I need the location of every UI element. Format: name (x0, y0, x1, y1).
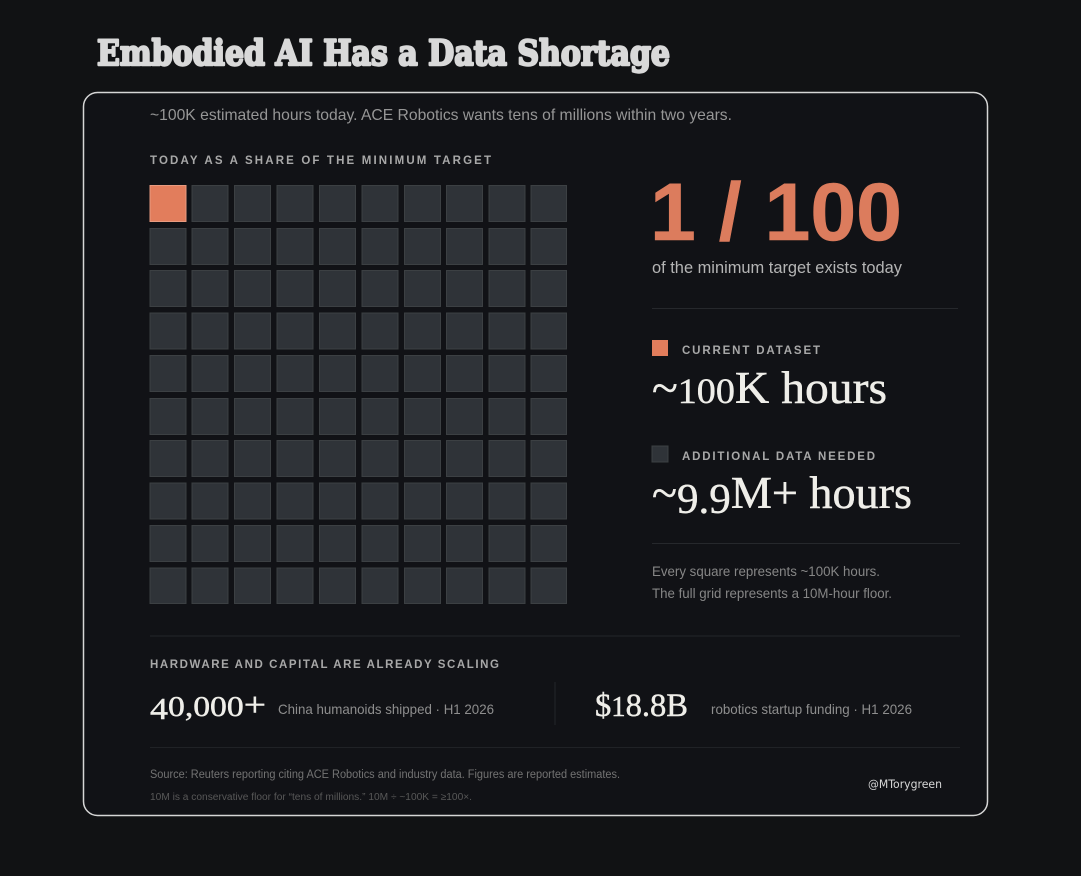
panel: main card (84, 92, 988, 816)
grid heading: TODAY AS A SHARE OF THE MINIMUM TARGET (150, 155, 491, 167)
grid note: The full grid represents a 10M-hour floor. (652, 586, 892, 601)
scaling heading: HARDWARE AND CAPITAL ARE ALREADY SCALING (150, 659, 499, 671)
legend: additional data needed (652, 446, 912, 523)
stat: humanoids shipped: 0,000 (168, 691, 244, 723)
grid note (652, 564, 892, 601)
big stat: 1 / 100 (650, 167, 902, 258)
legend: current dataset: ~100K hours (652, 363, 887, 413)
stat: humanoids shipped: + (244, 687, 263, 724)
source note: Source: Reuters reporting citing ACE Robotics and industry data. Figures are reported estimates. (150, 769, 620, 781)
legend: additional data needed: 9.9 (677, 477, 731, 523)
grid note: Every square represents ~100K hours. (652, 564, 880, 579)
source note: 10M is a conservative floor for “tens of millions.” 10M ÷ ~100K = ≥100×. (150, 792, 472, 803)
subtitle: ~100K estimated hours today. ACE Robotics wants tens of millions within two years. (150, 107, 732, 124)
stat: humanoids shipped: 4 (150, 691, 169, 726)
legend: additional data needed: M+ hours (731, 468, 912, 518)
legend: additional data needed: ~ (652, 468, 676, 518)
stat: startup funding (595, 688, 912, 724)
stat: humanoids shipped (150, 687, 494, 726)
legend: additional data needed: ADDITIONAL DATA NEEDED (682, 451, 875, 463)
stat: humanoids shipped: China humanoids shipped · H1 2026 (278, 701, 494, 717)
stat: startup funding: $18.8B (595, 688, 688, 724)
title: Embodied AI Has a Data Shortage (97, 33, 670, 74)
attribution: @MTorygreen (868, 777, 942, 791)
legend: current dataset: CURRENT DATASET (682, 345, 820, 357)
source note (150, 769, 620, 803)
big stat caption: of the minimum target exists today (652, 259, 903, 277)
stat: startup funding: robotics startup funding · H1 2026 (711, 701, 912, 717)
legend: current dataset (652, 340, 887, 413)
waffle chart: 100 squares (150, 186, 566, 604)
